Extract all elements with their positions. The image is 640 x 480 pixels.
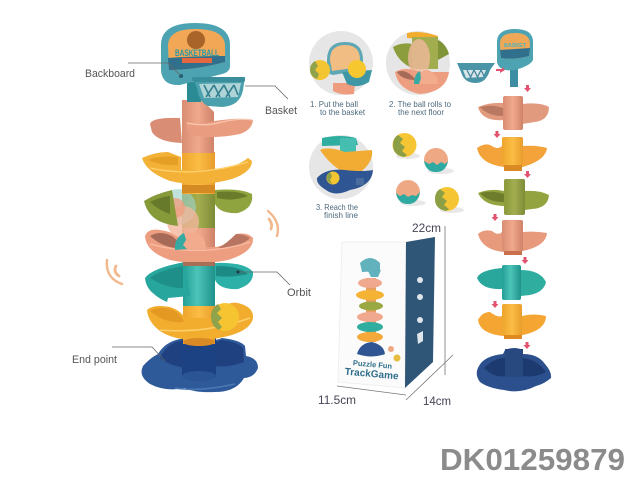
step 3 caption: finish line [324, 210, 358, 220]
tower: teal pole and tier [145, 262, 253, 306]
icon: motion arcs left [107, 260, 122, 284]
part: basket [457, 63, 495, 83]
icon: backboard [161, 23, 230, 85]
part: backboard and stem [497, 29, 533, 87]
tower: salmon top pole and tier [150, 100, 253, 153]
tower: base [142, 338, 258, 392]
arrow: down 6 [492, 301, 498, 308]
box front [338, 242, 406, 388]
part: teal tier [477, 265, 546, 300]
arrow: down 1 [524, 85, 531, 92]
backboard label: BASKETBALL [175, 48, 219, 58]
part: backboard and stem: BASKET [504, 43, 526, 49]
arrows between parts [492, 67, 531, 349]
step 2 caption: 2. The ball rolls to [389, 99, 451, 109]
arrow: down 2 [494, 131, 500, 138]
loose balls [392, 133, 464, 213]
callout: Backboard: Backboard [85, 68, 135, 80]
box title: Puzzle Fun [353, 358, 393, 371]
ball: yellow and olive, top left [392, 133, 420, 159]
callout: Orbit [236, 270, 311, 299]
step 3 illustration [309, 135, 373, 199]
box side [405, 237, 435, 388]
icon: basket [192, 77, 245, 107]
arrow: basket to stem [496, 67, 505, 73]
tower: olive tier [144, 190, 252, 226]
part: base [477, 348, 551, 391]
arrow: down 4 [492, 214, 498, 221]
box side icons [417, 277, 423, 344]
dimension: depth: 14cm [423, 396, 451, 408]
tower: yellow lower tier [147, 300, 253, 346]
tower: salmon middle tier [145, 228, 253, 266]
tower: olive pole [182, 190, 215, 234]
box mini tower [356, 258, 400, 362]
arrow: down 7 [524, 342, 530, 349]
callout: Basket: Basket [265, 105, 297, 117]
step 2 illustration [386, 31, 450, 95]
part: salmon tier one [478, 96, 549, 130]
tower: ball on lower tier [211, 303, 239, 331]
dimension: width: 11.5cm [318, 395, 356, 407]
tower: yellow upper tier [142, 152, 252, 194]
main toy tower [142, 23, 258, 392]
arrow: down 5 [522, 257, 528, 264]
part: orange tier one [477, 137, 547, 171]
callout: End point [72, 347, 165, 366]
part: salmon tier two [478, 220, 547, 255]
dimension: height: 22cm [412, 223, 441, 235]
dimension: depth [406, 355, 453, 408]
callout: Backboard [85, 63, 181, 80]
arrow: down 3 [524, 171, 531, 178]
dimension: width [318, 386, 406, 407]
part: olive tier [478, 179, 549, 215]
callout: End point: End point [72, 354, 117, 366]
ball: salmon and teal, top right [424, 148, 454, 174]
step 3 caption: 3. Reach the [316, 202, 358, 212]
callout: Basket [245, 86, 297, 117]
part: orange tier two [478, 304, 546, 339]
box title: TrackGame [344, 367, 399, 382]
step 1 caption: 1. Put the ball [310, 99, 358, 109]
step 1 illustration [309, 31, 373, 95]
callout: Orbit: Orbit [287, 287, 311, 299]
step 2 caption: the next floor [398, 107, 444, 117]
icon: motion arcs right [268, 211, 278, 236]
ball: yellow and olive, bottom right [435, 187, 464, 213]
step 1 caption: to the basket [320, 107, 366, 117]
exploded parts [457, 29, 551, 391]
ball: salmon and teal, bottom left [396, 180, 426, 206]
watermark: product code: DK01259879 [440, 442, 625, 477]
tower: stem [187, 82, 201, 102]
tower: translucent ball in transit [160, 189, 206, 250]
product box [338, 237, 435, 388]
